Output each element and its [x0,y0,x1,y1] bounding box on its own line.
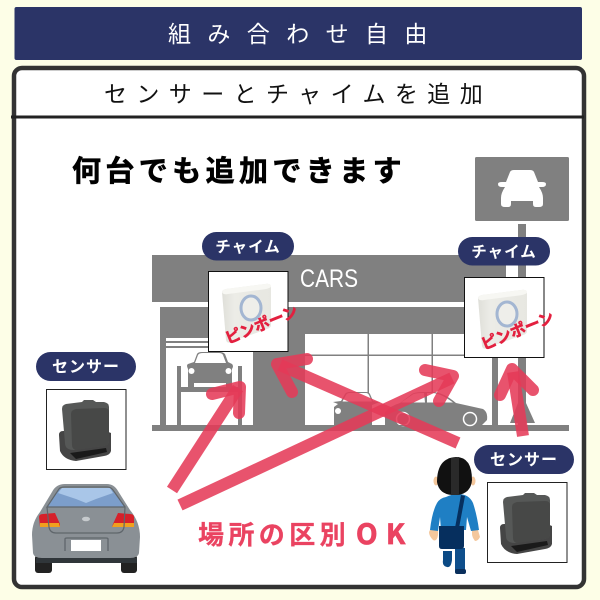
label: chime left: チャイム [215,238,281,256]
label: chime left [202,232,294,260]
label: chime right: チャイム [471,243,537,261]
label: sensor right [474,445,574,474]
title banner: 組み合わせ自由 [168,21,444,47]
chime photo right: ピンポーン [479,308,557,354]
cone [510,403,535,423]
sensor photo right [488,482,567,562]
label: sensor left: センサー [52,358,120,376]
chime photo left [208,272,301,352]
heading: any number can be added: 何台でも追加できます [72,155,406,188]
caption: locations can be distinguished: O [356,513,382,553]
title banner [14,7,582,60]
arrow: right sensor to left chime [277,359,458,443]
sensor photo left [46,390,126,470]
illustration: rear view of grey car [32,484,140,573]
caption: locations can be distinguished: K [386,513,410,553]
illustration: person walking away [429,457,480,574]
lift with car [177,366,181,426]
chime photo right [464,278,557,358]
roadside car sign [475,157,569,221]
label: sensor left [36,352,136,381]
label: chime right [458,237,550,266]
arrow: left sensor to left chime [172,387,240,490]
arrow: right sensor to right chime [500,369,533,436]
panel heading: センサーとチャイムを追加 [104,81,492,107]
cars in showroom [333,392,380,425]
illustration: car dealership building: CARS [300,265,358,293]
chime photo left: ピンポーン [223,302,301,348]
arrow: left sensor to right chime [180,370,453,505]
illustration: car dealership building [152,224,569,431]
label: sensor right: センサー [490,451,558,469]
caption: locations can be distinguished: 場所の区別 [198,520,350,550]
